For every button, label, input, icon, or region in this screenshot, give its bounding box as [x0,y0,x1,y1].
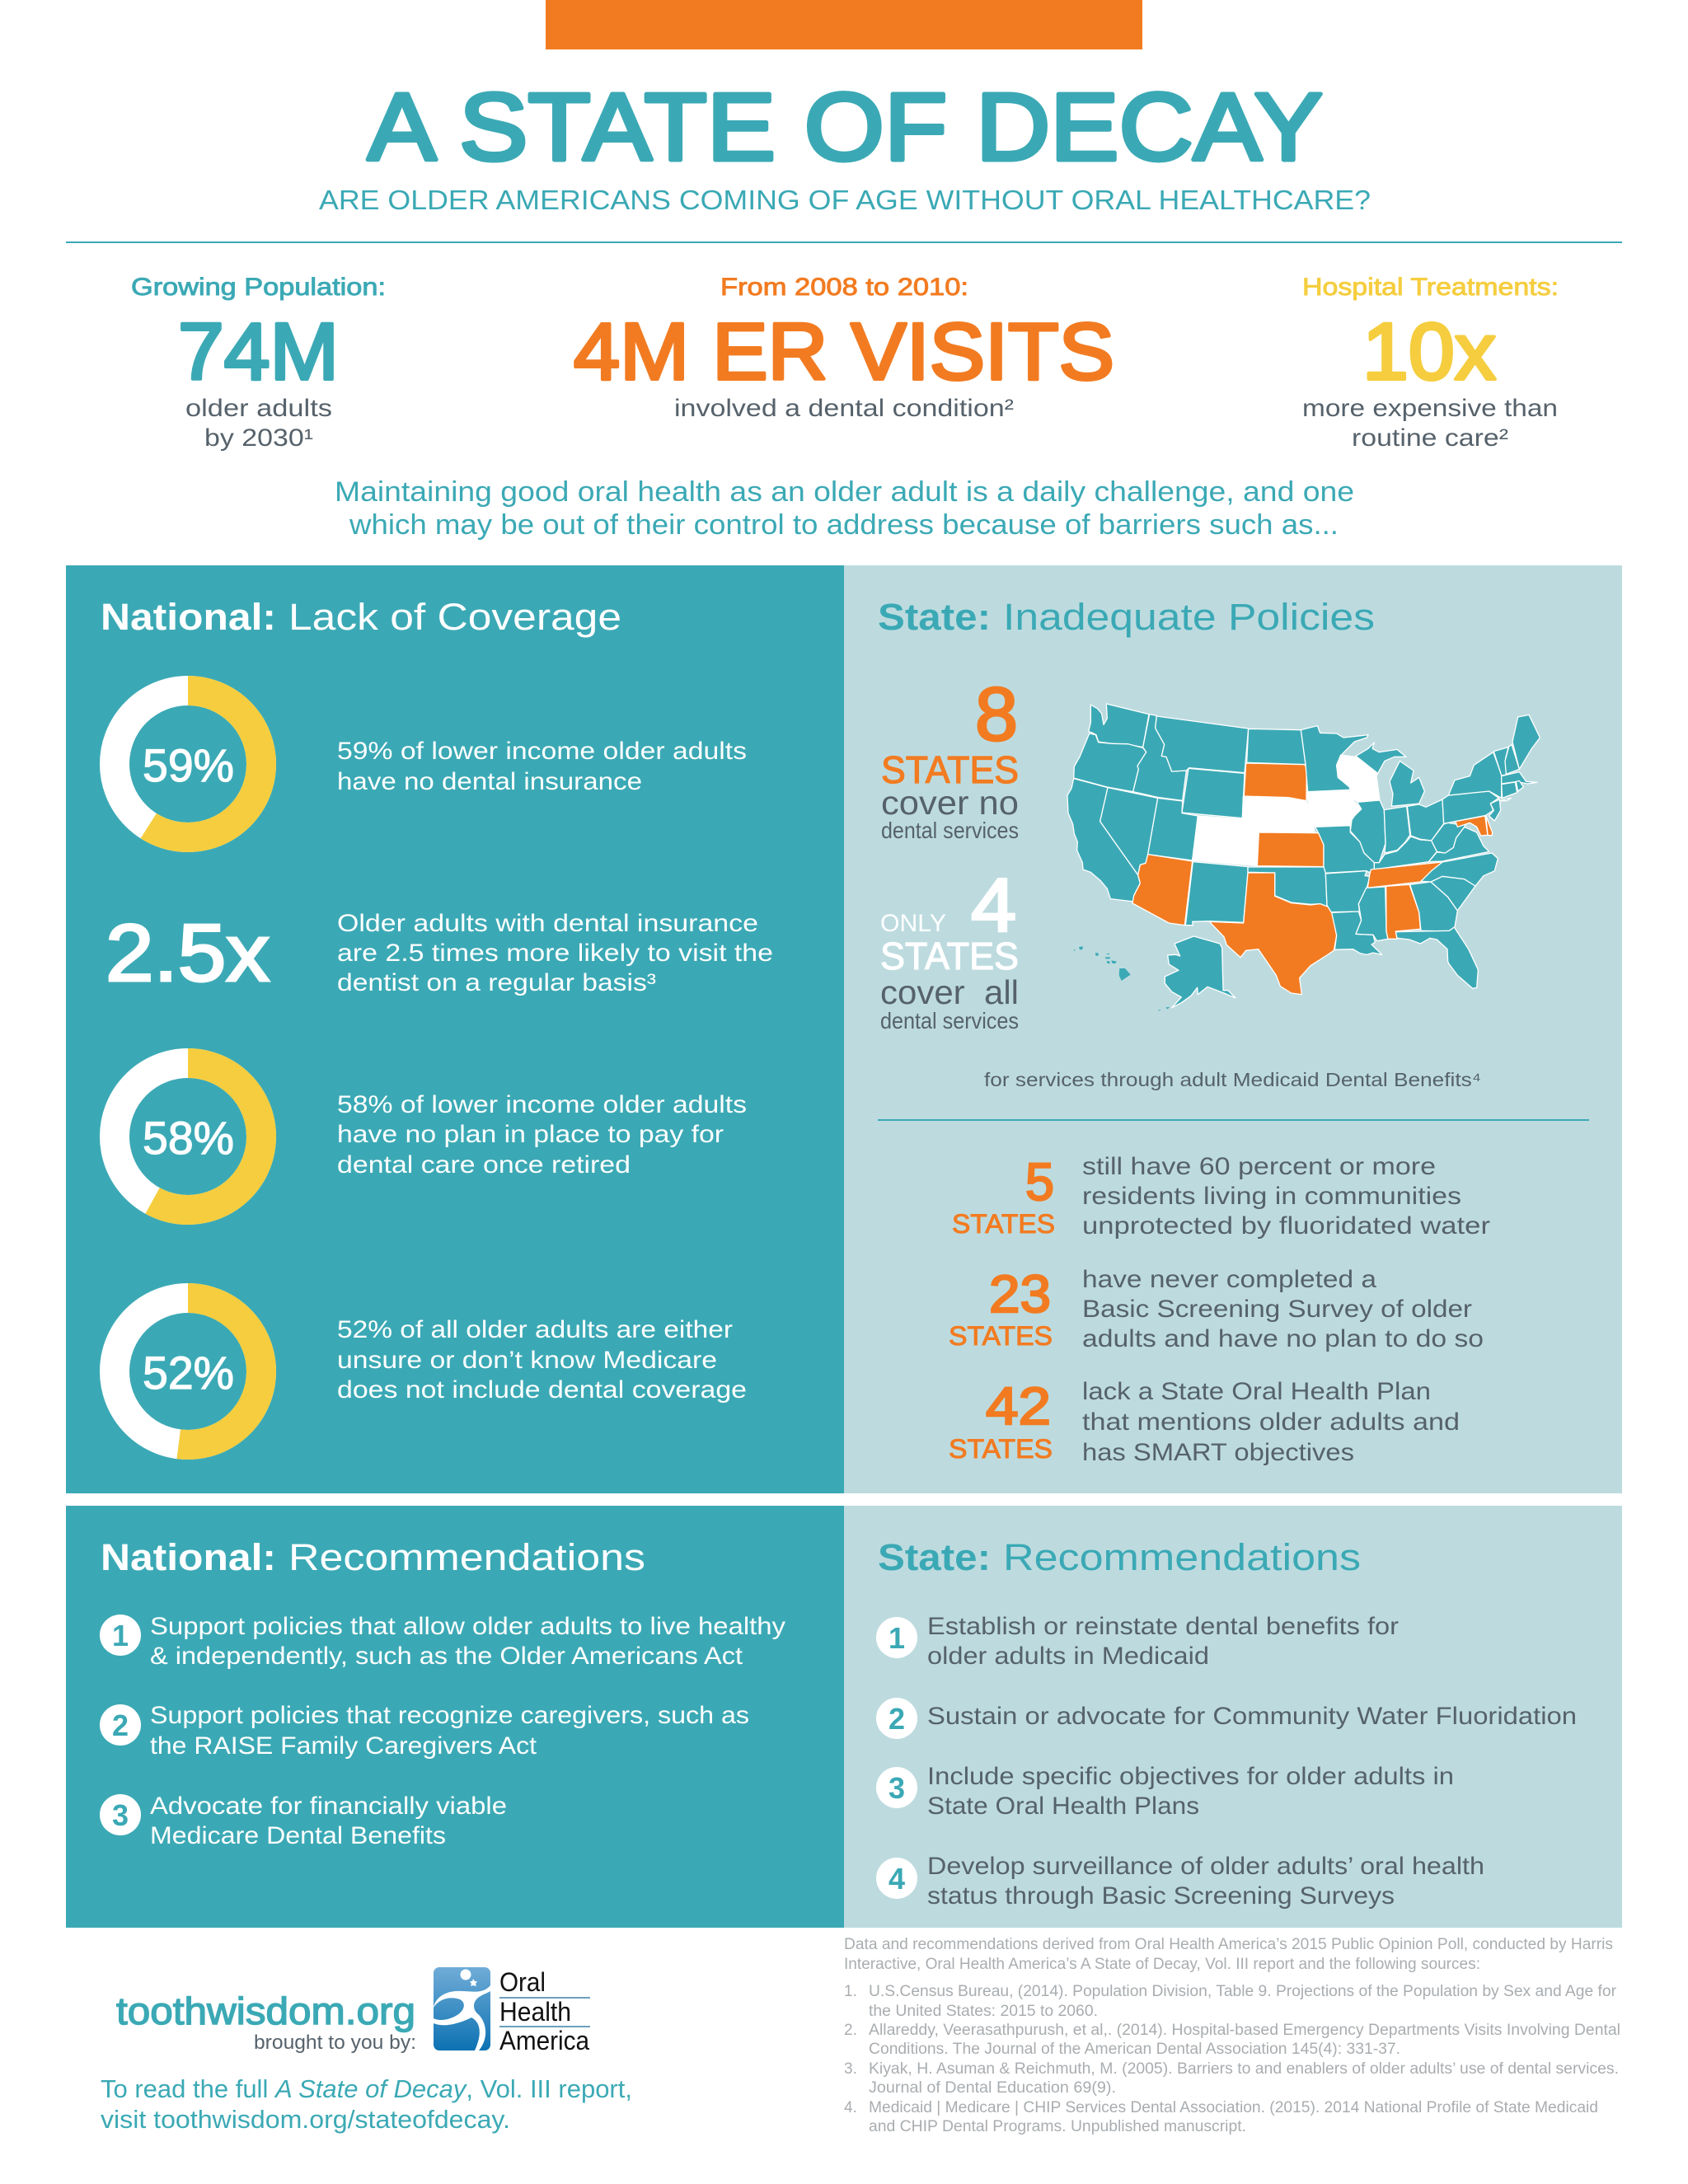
stat: hospital treatments [1302,274,1559,452]
recommendation 3: Medicare Dental Benefits [150,1822,446,1849]
heading: state recommendations: State: [878,1536,991,1578]
map caption: for services through adult Medicaid Dental Benefits⁴ [984,1069,1481,1090]
callout: only 4 states cover all dental services [880,864,1019,1033]
stat: 42 states: that mentions older adults and [1082,1408,1460,1436]
callout: only 4 states cover all dental services: ONLY [880,910,946,937]
text: 58% no plan [337,1091,747,1179]
logo: Oral Health America: America [499,2026,589,2055]
recommendation 1 [876,1613,1399,1670]
callout: only 4 states cover all dental services: STATES [880,935,1019,977]
stat: 42 states: STATES [949,1434,1053,1464]
stat: hospital treatments: Hospital Treatments: [1302,274,1559,301]
map: US states by Medicaid dental coverage [1067,704,1540,1011]
logo: Oral Health America [434,1967,590,2055]
stat: 42 states: lack a State Oral Health Plan [1082,1378,1431,1405]
stat: ER visits [574,274,1114,422]
footer: sources: Medicaid | Medicare | CHIP Services Dental Association. (2015). 2014 National Profile of State Medicaid [869,2099,1598,2116]
recommendation 2 [876,1698,1577,1739]
stat: 5 states: unprotected by fluoridated water [1082,1212,1490,1240]
footer: sources: Conditions. The Journal of the American Dental Association 145(4): 331-37. [869,2041,1400,2058]
heading: state recommendations [878,1536,1361,1578]
stat: 23 states: STATES [949,1321,1053,1351]
recommendation 1: Establish or reinstate dental benefits for [927,1613,1399,1640]
heading: state inadequate policies [878,596,1375,638]
recommendation 1 [100,1613,785,1670]
recommendation 3 [100,1793,507,1849]
callout: 8 states cover no dental services: STATES [881,748,1019,791]
recommendation 4 [876,1853,1484,1910]
stat: hospital treatments: 10x [1362,307,1496,396]
stat: 23 states: have never completed a [1082,1266,1376,1293]
text: 52% unsure [337,1316,747,1404]
callout: only 4 states cover all dental services: cover all [880,973,1019,1011]
heading: state inadequate policies: State: [878,596,991,638]
text: 59% no insurance: 59% of lower income older adults [337,738,747,765]
panel: state recommendations [844,1506,1622,1928]
footer: sources [844,1936,1620,2135]
footer: report link: To read the full A State of Decay, Vol. III report, [101,2074,632,2103]
footer: sources: 4. [844,2099,857,2116]
callout: 8 states cover no dental services: cover no [881,784,1019,822]
recommendation 3: 3 [112,1798,129,1832]
stat: 42 states: has SMART objectives [1082,1439,1354,1466]
text: 2.5 times: Older adults with dental insurance [337,910,758,937]
footer: toothwisdom brand: brought to you by: [254,2032,416,2054]
donut chart 59% [115,691,261,837]
stat: 5 states: STATES [952,1209,1055,1239]
heading: national recommendations: National: [101,1536,276,1578]
subtitle: ARE OLDER AMERICANS COMING OF AGE WITHOUT ORAL HEALTHCARE? [319,185,1371,215]
text: 2.5 times: are 2.5 times more likely to visit the [337,940,773,967]
stat: hospital treatments: routine care² [1352,424,1508,452]
text: 59% no insurance [337,738,747,795]
recommendation 3: Include specific objectives for older adults in [927,1763,1454,1790]
panel: state inadequate policies [844,565,1622,1493]
recommendation 3: 3 [889,1771,905,1805]
title: A STATE OF DECAY [368,73,1323,180]
footer: toothwisdom brand: toothwisdom.org [116,1990,415,2032]
text: 58% no plan: have no plan in place to pay for [337,1121,724,1148]
callout: 8 states cover no dental services [881,673,1019,843]
donut chart 52%: 52% [143,1347,234,1399]
footer: sources: Data and recommendations derived from Oral Health America’s 2015 Public Opinion Poll, conducted by Harris [844,1936,1613,1953]
stat: 42 states: 42 [986,1376,1051,1436]
intro paragraph: Maintaining good oral health as an older adult is a daily challenge, and one [335,476,1354,508]
footer: report link [101,2074,632,2134]
callout: 8 states cover no dental services: dental services [881,818,1019,843]
stat: 23 states [949,1264,1484,1352]
footer: sources: Interactive, Oral Health America’s A State of Decay, Vol. III report and the following sources: [844,1956,1480,1973]
callout: 8 states cover no dental services: 8 [975,673,1018,757]
heading: state recommendations: Recommendations [1003,1536,1361,1578]
text: 52% unsure: unsure or don’t know Medicare [337,1347,717,1374]
stat: 23 states: adults and have no plan to do so [1082,1325,1484,1352]
footer: sources: 2. [844,2022,857,2039]
footer: report link: visit toothwisdom.org/stateofdecay. [101,2105,510,2134]
panel: national lack of coverage [66,565,844,1493]
text: 58% no plan: 58% of lower income older adults [337,1091,747,1118]
stat: 5 states [952,1152,1490,1240]
donut chart 59%: 59% [143,739,234,791]
heading: national recommendations [101,1536,645,1578]
heading: national lack of coverage [101,596,621,638]
stat: 5 states: residents living in communities [1082,1183,1461,1210]
footer: sources: and CHIP Dental Programs. Unpublished manuscript. [869,2118,1246,2135]
heading: national lack of coverage: National: [101,596,276,638]
recommendation 1: 1 [889,1621,905,1655]
stat: 5 states: still have 60 percent or more [1082,1153,1436,1180]
recommendation 4: 4 [889,1862,905,1896]
top orange bar [546,0,1142,49]
recommendation 2: Sustain or advocate for Community Water Fluoridation [927,1703,1577,1730]
heading: national recommendations: Recommendations [288,1536,645,1578]
stat: 42 states [949,1376,1460,1466]
footer: sources: 1. [844,1983,857,2000]
footer: sources: the United States: 2015 to 2060. [869,2003,1098,2020]
stat: growing population [131,274,386,452]
intro paragraph [335,476,1354,541]
stat 2.5x: 2.5x [106,907,270,998]
stat: ER visits: 4M ER VISITS [574,307,1114,396]
logo: Oral Health America: Oral [499,1967,546,1997]
stat: 23 states: 23 [989,1264,1051,1324]
recommendation 1: Support policies that allow older adults to live healthy [150,1613,785,1640]
heading: national lack of coverage: Lack of Coverage [288,596,621,638]
panel: national recommendations [66,1506,844,1928]
footer: sources: Kiyak, H. Asuman & Reichmuth, M. (2005). Barriers to and enablers of older adults’ use of dental services. [869,2060,1619,2078]
recommendation 4: status through Basic Screening Surveys [927,1882,1395,1910]
footer: sources: 3. [844,2060,857,2078]
stat: growing population: Growing Population: [131,274,386,301]
recommendation 2: 2 [112,1708,129,1742]
donut chart 58% [115,1063,261,1210]
footer: sources: Journal of Dental Education 69(9). [869,2079,1116,2097]
heading: state inadequate policies: Inadequate Policies [1003,596,1375,638]
text: 58% no plan: dental care once retired [337,1151,631,1179]
footer: sources: Allareddy, Veerasathpurush, et al,. (2014). Hospital-based Emergency Departments Visits Involving Dental [869,2022,1620,2039]
stat: 23 states: Basic Screening Survey of older [1082,1296,1472,1323]
logo: Oral Health America: Health [499,1997,571,2027]
recommendation 2: 2 [889,1702,905,1736]
recommendation 2: the RAISE Family Caregivers Act [150,1732,537,1760]
recommendation 3: State Oral Health Plans [927,1793,1199,1820]
text: 2.5 times [337,910,773,996]
recommendation 2: Support policies that recognize caregivers, such as [150,1702,749,1729]
donut chart 58%: 58% [143,1112,234,1164]
recommendation 3 [876,1763,1454,1820]
stat: 5 states: 5 [1025,1152,1054,1212]
footer: toothwisdom brand [116,1990,416,2054]
text: 2.5 times: dentist on a regular basis³ [337,969,656,996]
recommendation 2 [100,1702,749,1760]
recommendation 4: Develop surveillance of older adults’ oral health [927,1853,1484,1880]
recommendation 3: Advocate for financially viable [150,1793,507,1820]
stat: ER visits: From 2008 to 2010: [720,274,968,301]
recommendation 1: older adults in Medicaid [927,1643,1209,1670]
recommendation 1: & independently, such as the Older Americans Act [150,1643,743,1670]
callout: only 4 states cover all dental services: 4 [971,864,1016,948]
donut chart 52% [115,1298,261,1445]
stat: growing population: 74M [178,307,339,396]
text: 59% no insurance: have no dental insurance [337,768,642,795]
stat: growing population: older adults [185,395,332,422]
footer: sources: U.S.Census Bureau, (2014). Population Division, Table 9. Projections of the Population by Sex and Age for [869,1983,1617,2000]
recommendation 1: 1 [112,1619,129,1652]
stat: growing population: by 2030¹ [204,424,313,452]
intro paragraph: which may be out of their control to address because of barriers such as... [349,509,1339,541]
stat: ER visits: involved a dental condition² [674,395,1014,422]
text: 52% unsure: 52% of all older adults are either [337,1316,733,1343]
callout: only 4 states cover all dental services: dental services [880,1008,1019,1033]
stat: hospital treatments: more expensive than [1302,395,1558,422]
text: 52% unsure: does not include dental coverage [337,1376,747,1404]
